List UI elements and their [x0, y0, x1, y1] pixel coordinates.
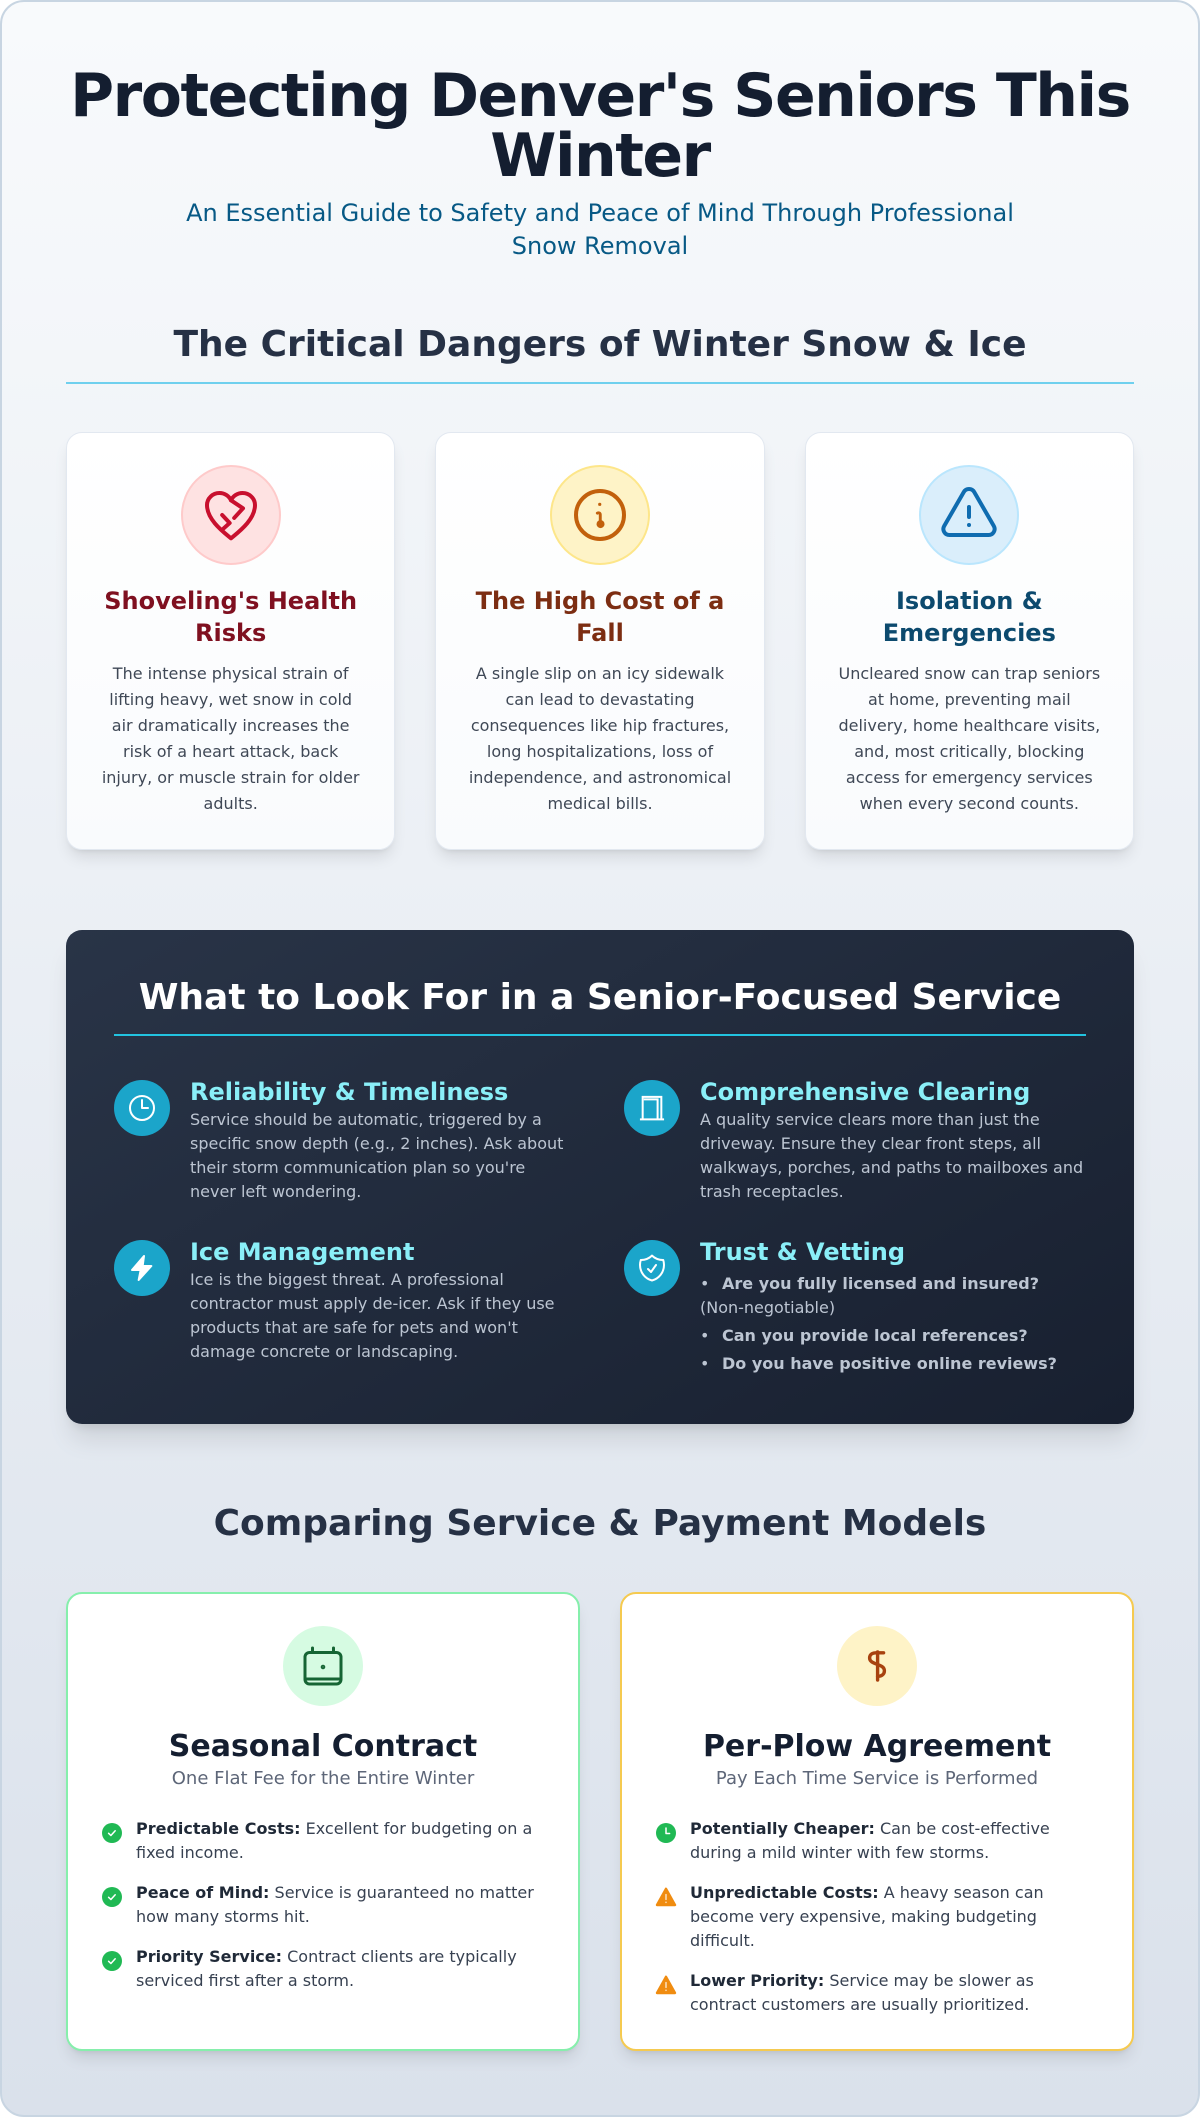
- icon: info circle: [550, 465, 650, 565]
- panel: danger cards: [65, 432, 1135, 860]
- icon: warning triangle: [919, 465, 1019, 565]
- card text: and, most critically, blocking: [854, 742, 1084, 761]
- card text: [469, 664, 731, 813]
- card text: [838, 664, 1100, 813]
- item text: Ice Management: [190, 1238, 414, 1266]
- card text: at home, preventing mail: [868, 690, 1071, 709]
- pro: potentially cheaper: [656, 1819, 1050, 1862]
- benefit list: [102, 1819, 534, 1990]
- item text: Comprehensive Clearing: [700, 1078, 1030, 1106]
- card heading: Risks: [195, 619, 266, 647]
- icon: door: [624, 1080, 680, 1136]
- benefit: priority service: serviced first after a storm.: [136, 1971, 354, 1990]
- benefit: priority service: [102, 1947, 517, 1990]
- item: reliability: [114, 1078, 563, 1201]
- card: cost of a fall: [435, 432, 765, 850]
- con: lower priority: Lower Priority: Service may be slower as: [690, 1971, 1034, 1990]
- pro: potentially cheaper: during a mild winter with few storms.: [690, 1843, 989, 1862]
- criteria grid: [114, 1078, 1083, 1373]
- card text: air dramatically increases the: [112, 716, 350, 735]
- card text: A single slip on an icy sidewalk: [476, 664, 724, 683]
- heading: what to look for: [114, 978, 1086, 1036]
- item text: Can you provide local references?: [722, 1326, 1028, 1345]
- benefit: priority service: Priority Service: Contract clients are typically: [136, 1947, 517, 1966]
- card heading: Shoveling's Health: [104, 587, 357, 615]
- card text: Uncleared snow can trap seniors: [838, 664, 1100, 683]
- plan title: Seasonal Contract: [169, 1729, 477, 1764]
- card text: access for emergency services: [846, 768, 1093, 787]
- icon: broken heart: [181, 465, 281, 565]
- card text: lifting heavy, wet snow in cold: [109, 690, 352, 709]
- item text: Ice is the biggest threat. A professional: [190, 1270, 504, 1289]
- card heading: Fall: [576, 619, 624, 647]
- item text: trash receptacles.: [700, 1182, 844, 1201]
- card text: can lead to devastating: [505, 690, 694, 709]
- con: unpredictable costs: become very expensive, making budgeting: [690, 1907, 1037, 1926]
- heading: critical dangers: [66, 325, 1134, 384]
- panel: what to look for: [66, 930, 1134, 1424]
- con: unpredictable costs: [656, 1883, 1044, 1950]
- card text: injury, or muscle strain for older: [102, 768, 359, 787]
- benefit: peace of mind: [102, 1883, 534, 1926]
- card: shoveling health risks: [66, 432, 395, 850]
- benefit: predictable costs: [102, 1819, 532, 1862]
- card text: risk of a heart attack, back: [123, 742, 338, 761]
- item: trust and vetting: [624, 1238, 1057, 1373]
- card: per-plow agreement: [620, 1592, 1134, 2051]
- card heading: [104, 587, 357, 647]
- item text: [190, 1078, 563, 1201]
- card heading: Emergencies: [883, 619, 1056, 647]
- plan title: Per-Plow Agreement: [703, 1729, 1051, 1764]
- card text: delivery, home healthcare visits,: [838, 716, 1100, 735]
- card text: The intense physical strain of: [113, 664, 349, 683]
- card: isolation and emergencies: [805, 432, 1134, 850]
- heading: critical dangers: The Critical Dangers of Winter Snow & Ice: [173, 324, 1027, 365]
- title: Winter: [490, 121, 710, 191]
- item text: •: [700, 1326, 709, 1345]
- benefit: predictable costs: fixed income.: [136, 1843, 244, 1862]
- title: [70, 61, 1130, 191]
- card heading: The High Cost of a: [476, 587, 724, 615]
- item text: damage concrete or landscaping.: [190, 1342, 458, 1361]
- con: unpredictable costs: Unpredictable Costs: A heavy season can: [690, 1883, 1044, 1902]
- item text: •: [700, 1354, 709, 1373]
- card heading: [883, 587, 1056, 647]
- item text: [700, 1078, 1083, 1201]
- icon: shield check: [624, 1240, 680, 1296]
- item text: Trust & Vetting: [700, 1238, 905, 1266]
- con: lower priority: contract customers are usually prioritized.: [690, 1995, 1029, 2014]
- item text: A quality service clears more than just the: [700, 1110, 1040, 1129]
- item text: their storm communication plan so you're: [190, 1158, 525, 1177]
- item text: never left wondering.: [190, 1182, 361, 1201]
- icon: dollar: [837, 1626, 917, 1706]
- panel: plan comparison: [65, 1592, 1135, 2061]
- con: lower priority: [656, 1971, 1034, 2014]
- item text: (Non-negotiable): [700, 1298, 835, 1317]
- title: Protecting Denver's Seniors This: [70, 61, 1130, 131]
- card: seasonal contract: [66, 1592, 580, 2051]
- pro: potentially cheaper: Potentially Cheaper: Can be cost-effective: [690, 1819, 1050, 1838]
- card text: independence, and astronomical: [469, 768, 731, 787]
- card text: adults.: [204, 794, 258, 813]
- item text: products that are safe for pets and won't: [190, 1318, 518, 1337]
- icon: calendar: [283, 1626, 363, 1706]
- subtitle: Snow Removal: [512, 232, 688, 260]
- subtitle: An Essential Guide to Safety and Peace of Mind Through Professional: [186, 199, 1014, 227]
- item text: Are you fully licensed and insured?: [722, 1274, 1039, 1293]
- item text: •: [700, 1274, 709, 1293]
- item text: Service should be automatic, triggered by a: [190, 1110, 542, 1129]
- card text: [102, 664, 360, 813]
- con: unpredictable costs: difficult.: [690, 1931, 755, 1950]
- plan tagline: Pay Each Time Service is Performed: [716, 1768, 1038, 1789]
- icon: clock: [114, 1080, 170, 1136]
- icon: lightning bolt: [114, 1240, 170, 1296]
- item text: contractor must apply de-icer. Ask if they use: [190, 1294, 555, 1313]
- item text: [700, 1238, 1057, 1373]
- item text: driveway. Ensure they clear front steps, all: [700, 1134, 1041, 1153]
- item text: Do you have positive online reviews?: [722, 1354, 1057, 1373]
- card text: consequences like hip fractures,: [471, 716, 729, 735]
- subtitle: [186, 199, 1014, 260]
- pros and cons list: [656, 1819, 1050, 2014]
- card heading: Isolation &: [896, 587, 1043, 615]
- item text: [190, 1238, 555, 1361]
- benefit: peace of mind: how many storms hit.: [136, 1907, 310, 1926]
- card text: long hospitalizations, loss of: [487, 742, 713, 761]
- card text: medical bills.: [547, 794, 653, 813]
- card heading: [476, 587, 724, 647]
- item text: specific snow depth (e.g., 2 inches). Ask about: [190, 1134, 563, 1153]
- plan tagline: One Flat Fee for the Entire Winter: [172, 1768, 474, 1789]
- card text: when every second counts.: [860, 794, 1079, 813]
- heading: what to look for: What to Look For in a Senior-Focused Service: [139, 977, 1061, 1018]
- item text: walkways, porches, and paths to mailboxes and: [700, 1158, 1083, 1177]
- heading: comparing models: Comparing Service & Payment Models: [214, 1503, 986, 1544]
- item: ice management: [114, 1238, 555, 1361]
- benefit: peace of mind: Peace of Mind: Service is guaranteed no matter: [136, 1883, 534, 1902]
- item text: Reliability & Timeliness: [190, 1078, 508, 1106]
- item: comprehensive clearing: [624, 1078, 1083, 1201]
- benefit: predictable costs: Predictable Costs: Excellent for budgeting on a: [136, 1819, 532, 1838]
